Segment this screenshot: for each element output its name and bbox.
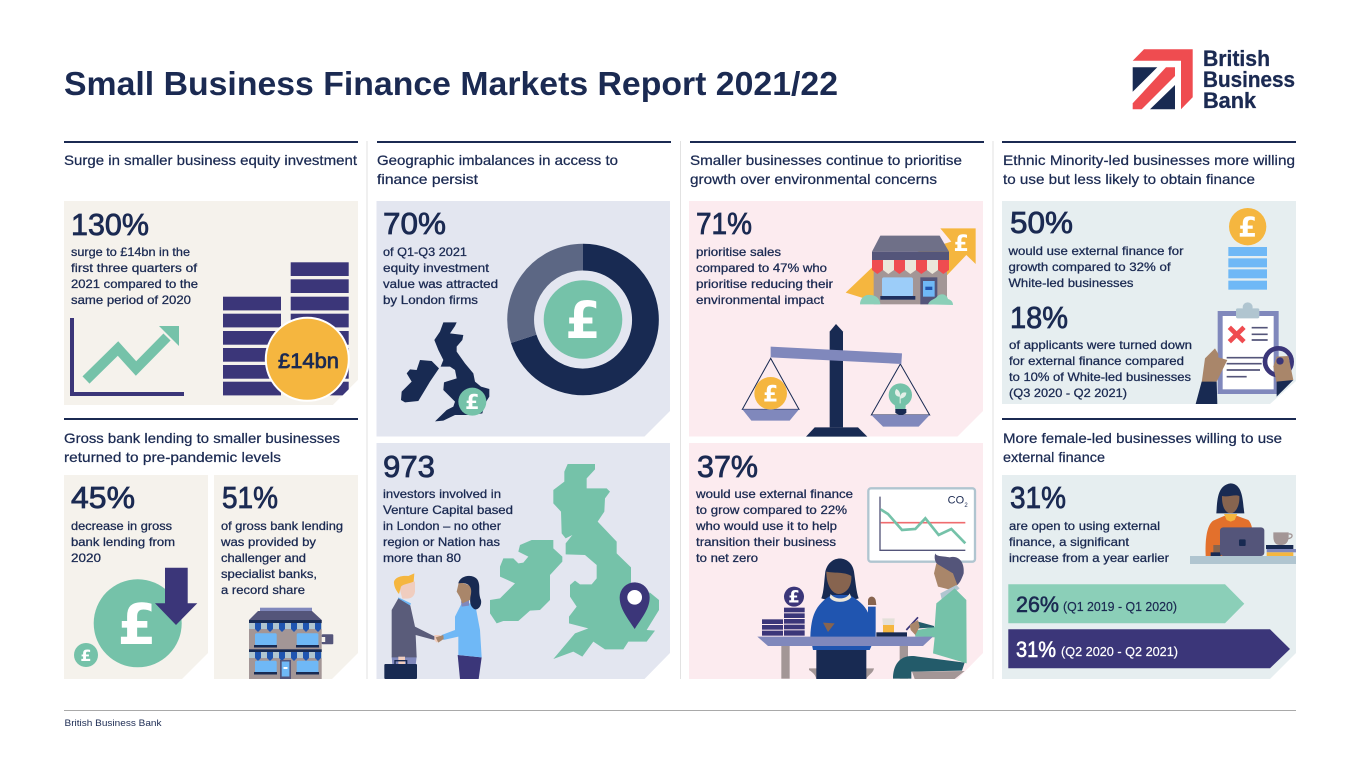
heading: geographic imbalances: Geographic imbalances in access to xyxy=(377,152,618,168)
heading: environmental concerns: growth over environmental concerns xyxy=(690,171,937,187)
donut chart: 70 percent: £ xyxy=(565,292,601,351)
text: turned down description: to 10% of White-led businesses xyxy=(1009,370,1191,384)
text: net zero description: would use external finance xyxy=(695,487,853,501)
text: decrease description: 2020 xyxy=(71,551,101,565)
panel: equity surge xyxy=(64,201,358,405)
logo: British Business Bank: Bank xyxy=(1203,88,1257,113)
logo: British Business Bank xyxy=(1133,46,1295,113)
stat: 45%: 45% xyxy=(71,480,135,515)
text: challenger description xyxy=(220,519,343,597)
panel: 45% decrease in lending xyxy=(64,475,208,679)
panel: venture capital investors xyxy=(376,443,670,679)
text: sales description: environmental impact xyxy=(696,293,825,307)
text: surge description: same period of 2020 xyxy=(71,293,191,307)
text: surge description: first three quarters of xyxy=(71,261,198,275)
heading: gross bank lending: Gross bank lending to smaller businesses xyxy=(64,430,340,446)
text: net zero description: transition their business xyxy=(696,535,836,549)
bar: 31 percent: (Q2 2020 - Q2 2021) xyxy=(1061,644,1178,659)
text: growth finance description: White-led businesses xyxy=(1008,276,1134,290)
text: investors description: in London – no other xyxy=(383,519,501,533)
icon: pound coin with down arrow: £ xyxy=(80,646,92,665)
stat: 973: 973 xyxy=(383,449,435,484)
bar: 26 percent: (Q1 2019 - Q1 2020) xyxy=(1063,599,1177,614)
text: net zero description: to net zero xyxy=(696,551,758,565)
illustration: rejected application on clipboard xyxy=(1196,302,1293,404)
text: net zero description: who would use it to help xyxy=(695,519,837,533)
text: sales description: prioritise reducing their xyxy=(696,277,833,291)
text: surge description xyxy=(71,245,198,307)
heading: environmental concerns xyxy=(690,152,962,187)
stat: 31%: 31% xyxy=(1010,480,1066,515)
text: open to finance description: are open to using external xyxy=(1009,519,1160,533)
bar: 26 percent: 26% xyxy=(1016,592,1059,617)
heading: geographic imbalances: finance persist xyxy=(377,171,478,187)
map: UK with London pin xyxy=(490,464,659,659)
stat: 70%: 70% xyxy=(383,206,446,241)
text: surge description: 2021 compared to the xyxy=(71,277,198,291)
heading: female-led businesses: More female-led businesses willing to use xyxy=(1003,430,1282,446)
text: sales description xyxy=(696,245,833,307)
heading: female-led businesses xyxy=(1003,430,1282,465)
stat: 130%: 130% xyxy=(71,207,149,242)
text: challenger description: a record share xyxy=(221,583,305,597)
stat: 37%: 37% xyxy=(697,449,758,484)
text: turned down description: (Q3 2020 - Q2 2021) xyxy=(1009,386,1127,400)
icon: pound coin with down arrow: £ xyxy=(118,593,156,658)
text: challenger description: challenger and xyxy=(221,551,306,565)
icon: coin on stack: £ xyxy=(1238,213,1257,244)
text: open to finance description xyxy=(1009,519,1169,565)
text: sales description: compared to 47% who xyxy=(696,261,827,275)
heading: ethnic minority-led businesses: Ethnic Minority-led businesses more willing xyxy=(1003,152,1295,168)
panel: external finance for net zero xyxy=(689,443,983,679)
logo: British Business Bank: Business xyxy=(1203,67,1295,92)
bar: 26 percent xyxy=(1008,584,1244,623)
text: decrease description: decrease in gross xyxy=(71,519,172,533)
text: net zero description: to grow compared to 22% xyxy=(696,503,847,517)
heading: gross bank lending: returned to pre-pandemic levels xyxy=(64,449,281,465)
text: investors description xyxy=(383,487,513,565)
panel: London equity share xyxy=(376,201,670,436)
text: growth finance description: growth compared to 32% of xyxy=(1008,260,1171,274)
text: challenger description: was provided by xyxy=(220,535,316,549)
text: open to finance description: finance, a significant xyxy=(1009,535,1130,549)
coin stacks with £14bn badge: £14bn xyxy=(278,350,339,373)
stat: 51%: 51% xyxy=(222,480,278,515)
text: investors description: region or Nation has xyxy=(383,535,500,549)
text: challenger description: specialist banks, xyxy=(221,567,317,581)
heading: gross bank lending xyxy=(64,430,340,465)
chart: CO2 emissions screen: 2 xyxy=(964,503,968,509)
text: London description: equity investment xyxy=(383,261,490,275)
text: turned down description: for external finance compared xyxy=(1009,354,1184,368)
coin stacks with £14bn badge xyxy=(223,262,358,405)
text: surge description: surge to £14bn in the xyxy=(71,245,190,259)
donut chart: 70 percent xyxy=(521,257,645,382)
illustration: shop with rising arrow xyxy=(846,228,976,305)
text: investors description: investors involved in xyxy=(383,487,501,501)
stat: 18%: 18% xyxy=(1010,300,1068,335)
logo: British Business Bank: British xyxy=(1203,46,1270,71)
text: decrease description xyxy=(71,519,175,565)
heading: equity investment: Surge in smaller business equity investment xyxy=(64,152,357,168)
panel: sales prioritised xyxy=(689,201,983,437)
stat: 50%: 50% xyxy=(1010,205,1073,240)
line chart with rising arrow xyxy=(72,318,184,394)
heading: geographic imbalances xyxy=(377,152,618,187)
map: UK with pound marker xyxy=(401,322,489,421)
panel: female-led finance xyxy=(1002,475,1296,679)
map: UK with pound marker: £ xyxy=(465,390,480,414)
text: investors description: more than 80 xyxy=(383,551,461,565)
illustration: two colleagues at a table: £ xyxy=(788,588,800,607)
heading: ethnic minority-led businesses xyxy=(1003,152,1295,187)
text: London description xyxy=(383,245,498,307)
text: growth finance description xyxy=(1007,244,1184,290)
illustration: two colleagues at a table xyxy=(757,553,967,679)
text: decrease description: bank lending from xyxy=(71,535,175,549)
chart: CO2 emissions screen: CO xyxy=(948,495,965,507)
heading: female-led businesses: external finance xyxy=(1003,449,1105,465)
text: London description: value was attracted xyxy=(383,277,498,291)
text: turned down description: of applicants were turned down xyxy=(1009,338,1192,352)
panel: ethnic minority-led finance xyxy=(1002,201,1296,404)
heading: ethnic minority-led businesses: to use but less likely to obtain finance xyxy=(1003,171,1255,187)
text: turned down description xyxy=(1009,338,1192,400)
text: challenger description: of gross bank lending xyxy=(221,519,343,533)
icon: bank building xyxy=(249,608,333,679)
bar: 31 percent xyxy=(1008,629,1290,668)
panel: 51% challenger banks xyxy=(214,475,358,679)
text: London description: of Q1-Q3 2021 xyxy=(383,245,467,259)
icon: pound coin with down arrow xyxy=(74,568,197,667)
icon: coin on stack xyxy=(1228,208,1267,290)
illustration: shop with rising arrow: £ xyxy=(954,232,969,257)
heading: environmental concerns: Smaller businesses continue to prioritise xyxy=(690,152,962,168)
text: sales description: prioritise sales xyxy=(696,245,781,259)
text: investors description: Venture Capital based xyxy=(383,503,513,517)
illustration: balance scales xyxy=(742,324,930,437)
stat: 71%: 71% xyxy=(696,206,752,241)
text: net zero description xyxy=(695,487,853,565)
illustration: two people shaking hands xyxy=(384,573,482,679)
illustration: woman at laptop xyxy=(1190,483,1296,564)
text: open to finance description: increase from a year earlier xyxy=(1009,551,1169,565)
title: Small Business Finance Markets Report 2021/22 xyxy=(64,66,838,103)
text: London description: by London firms xyxy=(383,293,478,307)
illustration: balance scales: £ xyxy=(763,382,778,407)
text: growth finance description: would use external finance for xyxy=(1007,244,1184,258)
bar: 31 percent: 31% xyxy=(1016,637,1056,662)
chart: CO2 emissions screen xyxy=(868,488,975,562)
footer: British Business Bank xyxy=(64,718,162,729)
